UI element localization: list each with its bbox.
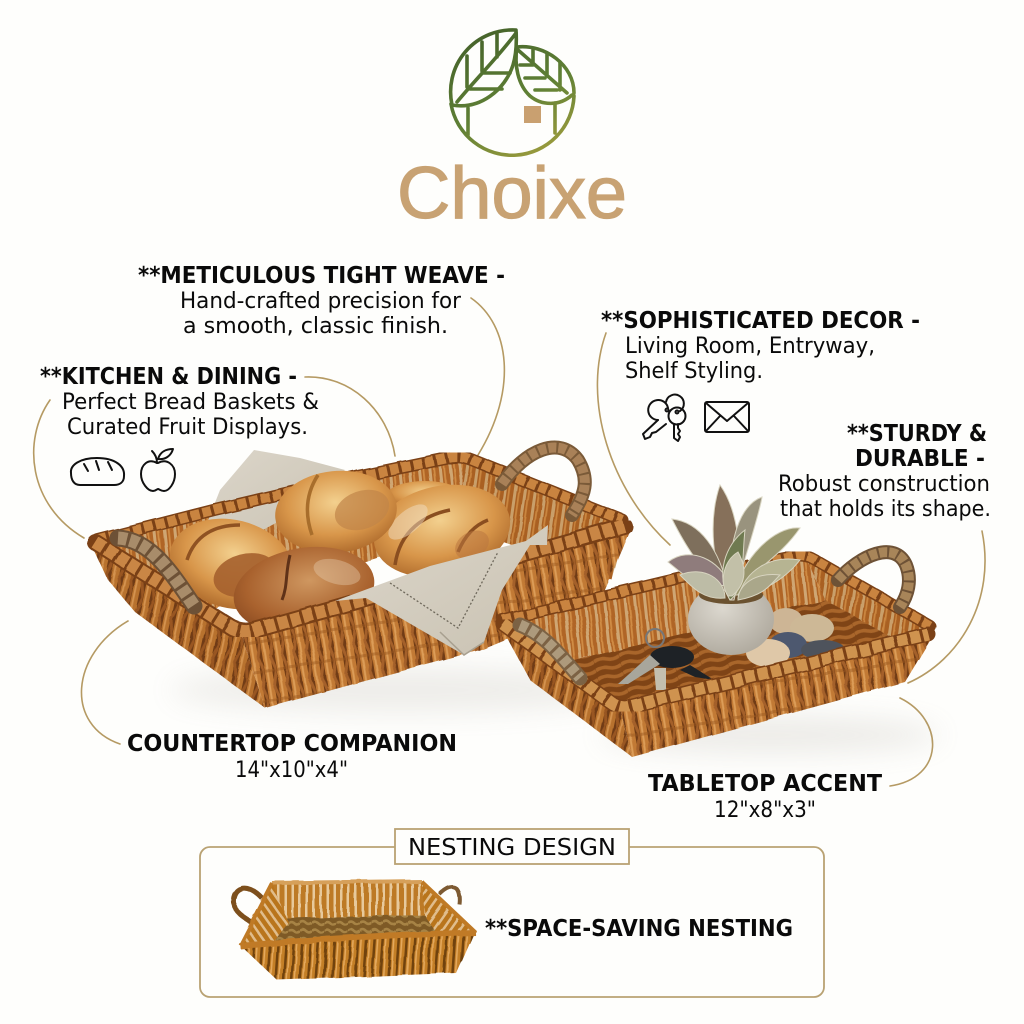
tray left front wall — [500, 625, 632, 757]
basket interior back walls — [95, 456, 628, 610]
small tray basket with plant, keys and stones — [500, 485, 934, 757]
bread: right loaf — [365, 473, 519, 589]
tray rope handle right — [838, 552, 909, 607]
callout: meticulous tight weave: **METICULOUS TIGHT WEAVE - — [138, 263, 505, 289]
bread: left loaf — [160, 506, 304, 622]
basket left front wall — [92, 545, 265, 708]
tray front rim — [503, 624, 928, 707]
callout: sturdy and durable: Robust construction — [778, 472, 990, 497]
callout: sophisticated decor: Shelf Styling. — [625, 359, 763, 384]
back rim — [98, 457, 622, 540]
callout: kitchen and dining: Curated Fruit Displays. — [67, 415, 308, 440]
front rim — [96, 526, 624, 632]
size label: tabletop accent: 12"x8"x3" — [714, 798, 816, 823]
icon: keys — [643, 395, 686, 441]
tray right front wall — [620, 634, 934, 757]
basket right front wall — [240, 530, 630, 708]
rope handle right — [502, 448, 585, 515]
back linen cloth — [205, 450, 345, 545]
callout: kitchen and dining: Perfect Bread Baskets & — [62, 390, 319, 415]
tray back walls — [500, 555, 932, 665]
tray floor — [555, 590, 905, 720]
callout: sophisticated decor: Living Room, Entryway, — [625, 334, 875, 359]
concrete pot — [688, 583, 774, 655]
logo — [397, 30, 627, 234]
front linen cloth — [335, 525, 548, 655]
tray rope handle left — [520, 625, 580, 678]
rope handle left — [118, 538, 194, 606]
panel heading: NESTING DESIGN — [408, 835, 616, 861]
bread: top loaf — [271, 465, 401, 559]
logo emblem: house inside two leaves — [451, 30, 574, 155]
logo window — [524, 106, 541, 123]
panel: nesting design — [200, 829, 824, 997]
panel frame — [200, 847, 824, 997]
nested baskets image — [233, 880, 475, 980]
callout: kitchen and dining — [40, 364, 319, 440]
brand name: Choixe — [397, 153, 627, 234]
callout: sturdy and durable: DURABLE - — [855, 446, 985, 472]
icon: apple — [141, 449, 175, 491]
panel heading — [395, 829, 629, 864]
rear bread — [387, 481, 463, 509]
size label: tabletop accent: TABLETOP ACCENT — [648, 771, 882, 797]
size label: countertop companion: COUNTERTOP COMPANION — [127, 731, 457, 757]
connector lines — [34, 298, 985, 786]
icon: bread — [71, 458, 124, 485]
size label: tabletop accent — [648, 771, 882, 823]
callout: sturdy and durable: that holds its shape. — [780, 497, 991, 522]
tray back rim — [503, 556, 930, 626]
size label: countertop companion — [127, 731, 457, 783]
panel caption: **SPACE-SAVING NESTING — [485, 916, 793, 942]
keys — [618, 629, 714, 690]
stones — [746, 608, 845, 667]
callout: meticulous tight weave — [138, 263, 505, 339]
callout: sturdy and durable: **STURDY & — [847, 421, 987, 447]
callout: sophisticated decor — [601, 308, 920, 384]
callout: meticulous tight weave: a smooth, classic finish. — [183, 314, 448, 339]
size label: countertop companion: 14"x10"x4" — [235, 758, 348, 783]
callout: sophisticated decor: **SOPHISTICATED DECOR - — [601, 308, 920, 334]
bread: front loaf — [227, 536, 381, 644]
succulent plant — [668, 485, 800, 600]
icon: envelope — [705, 402, 749, 432]
callout: sturdy and durable — [778, 421, 991, 522]
soft shadows — [170, 668, 940, 753]
callout: kitchen and dining: **KITCHEN & DINING - — [40, 364, 297, 390]
callout: meticulous tight weave: Hand-crafted precision for — [180, 289, 462, 314]
large basket with bread — [92, 448, 630, 708]
